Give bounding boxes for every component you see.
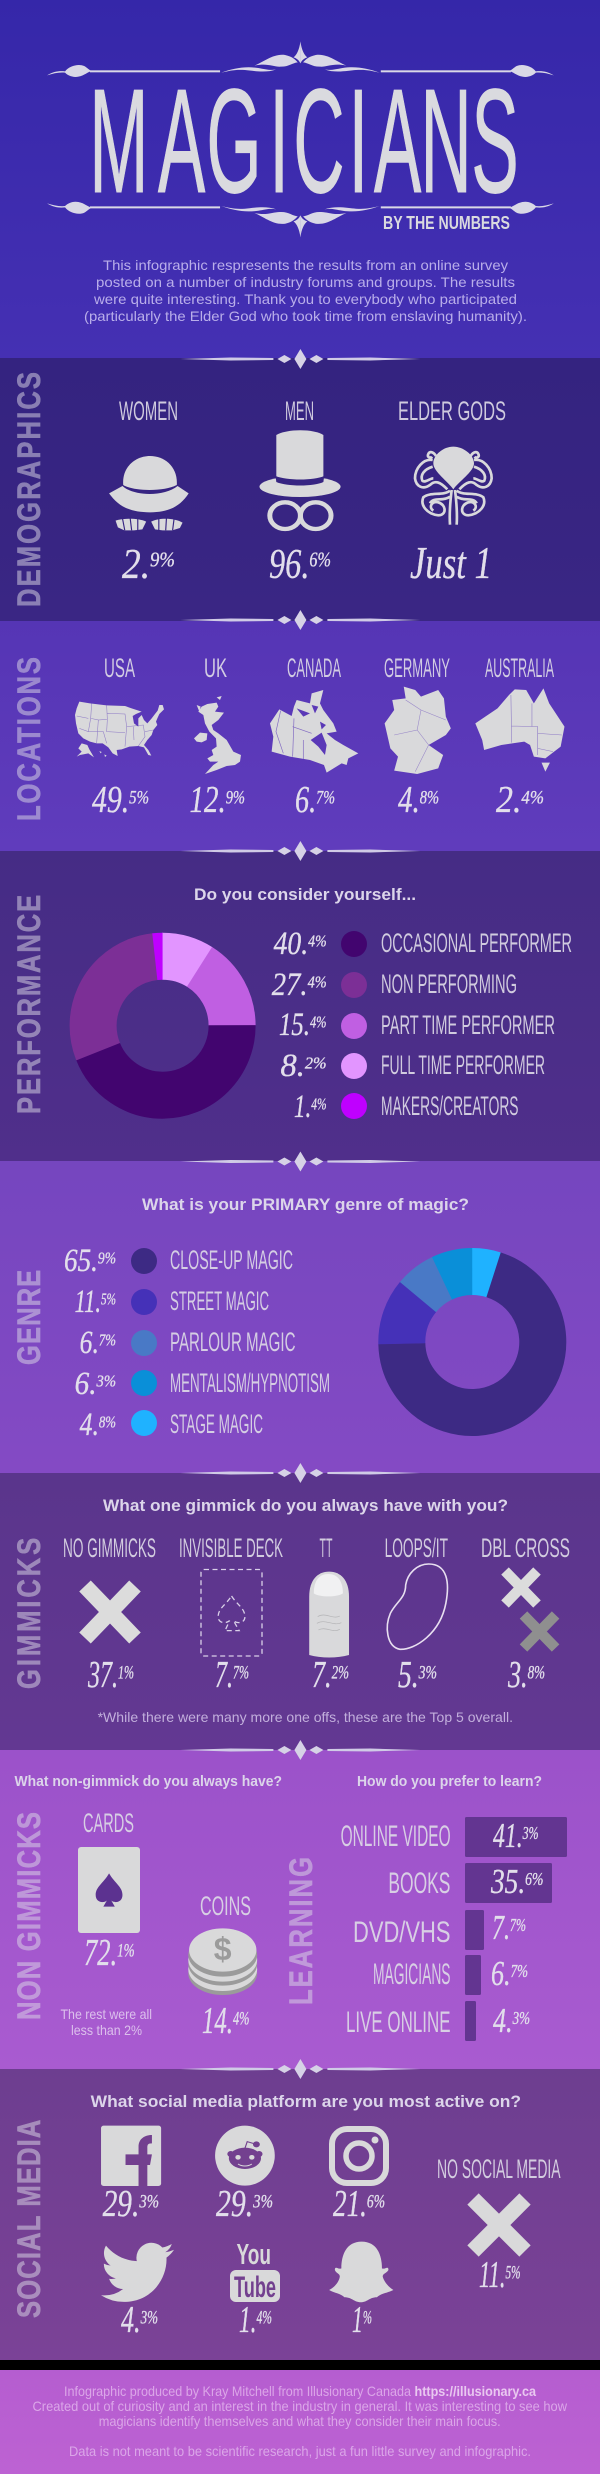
legend: street magic: [75, 1284, 269, 1320]
value: invisible deck: 7%: [233, 1662, 249, 1683]
icon: thumb tip: [309, 1572, 349, 1657]
icon: snapchat: [329, 2242, 393, 2302]
value: tt: 7.: [312, 1654, 340, 1696]
map: australia: [475, 688, 564, 772]
donut chart: genre: [373, 1243, 572, 1441]
label: women: WOMEN: [119, 396, 178, 426]
panel: genre: STREET MAGIC: [170, 1286, 269, 1316]
bar row: dvd and vhs: 7%: [510, 1915, 526, 1935]
panel: locations: GERMANY: [384, 653, 450, 683]
value: canada: 6.: [295, 779, 324, 821]
icon: rubber band loop: [387, 1564, 447, 1649]
panel: header: [0, 0, 600, 358]
section label: genre: GENRE: [12, 1270, 48, 1365]
value: youtube: 4%: [256, 2307, 272, 2328]
icon: x mark: [85, 1586, 135, 1638]
label: elder gods: ELDER GODS: [398, 396, 506, 426]
value: no social media: 5%: [505, 2262, 520, 2283]
legend: stage magic: STAGE MAGIC: [170, 1409, 263, 1439]
legend: non performing: 27.: [272, 967, 313, 1003]
intro text: were quite interesting. Thank you to everybody who participated: [93, 291, 517, 307]
intro text: This infographic respresents the results from an online survey: [103, 257, 508, 273]
panel: locations: CANADA: [287, 653, 341, 683]
icon: elder god: [415, 447, 492, 525]
value: double cross: 3.: [508, 1654, 536, 1696]
value: reddit: 3%: [252, 2191, 273, 2212]
bar row: online video: 3%: [522, 1823, 538, 1843]
section label: gimmicks: GIMMICKS: [12, 1538, 48, 1689]
icon: invisible card: [201, 1570, 262, 1656]
value: instagram: 6%: [367, 2191, 385, 2212]
legend: mentalism and hypnotism: 6.: [75, 1366, 99, 1402]
note: *While there were many more one offs, these are the Top 5 overall.: [98, 1709, 513, 1725]
legend: stage magic: 4.: [80, 1407, 104, 1443]
icon: top hat and glasses: [259, 430, 341, 529]
panel: gimmicks: INVISIBLE DECK: [179, 1533, 283, 1563]
map: germany: [385, 687, 451, 774]
label: usa: USA: [104, 653, 135, 683]
bar row: magicians: 7%: [511, 1961, 528, 1981]
icon: youtube: Tube: [234, 2271, 276, 2304]
value: usa: 49.: [92, 779, 140, 821]
legend: close-up magic: [64, 1243, 293, 1279]
legend: parlour magic: 7%: [99, 1331, 116, 1350]
credits text: Created out of curiosity and an interest in the industry in general. It was interesting to see how: [32, 2398, 568, 2414]
heading: What social media platform are you most active on?: [91, 2093, 521, 2111]
legend: part time performer: [279, 1007, 555, 1043]
legend: non performing: [272, 967, 517, 1003]
title: MAGICIANS: [89, 58, 519, 224]
subtitle: BY THE NUMBERS: [383, 212, 510, 233]
legend: makers and creators: 1.: [294, 1089, 319, 1125]
bar row: books: 6%: [525, 1869, 543, 1889]
icon: youtube: [230, 2239, 280, 2304]
label: cards: CARDS: [83, 1808, 134, 1838]
value: reddit: 29.: [216, 2183, 264, 2225]
heading: Do you consider yourself...: [194, 886, 416, 904]
value: uk: 9%: [226, 787, 245, 808]
bar row: online video: ONLINE VIDEO: [341, 1820, 451, 1853]
legend: full time performer: 8.: [280, 1048, 305, 1084]
label: uk: UK: [204, 653, 227, 683]
value: no gimmicks: 37.: [88, 1654, 136, 1696]
icon: woman hat and lashes: [109, 456, 189, 530]
icon: twitter: [101, 2243, 174, 2302]
legend: mentalism and hypnotism: 3%: [96, 1372, 116, 1391]
value: elder gods: Just 1: [410, 537, 492, 588]
bar row: live online: LIVE ONLINE: [346, 2006, 450, 2039]
legend: occasional performer: 4%: [308, 932, 327, 951]
legend: parlour magic: [80, 1325, 295, 1361]
value: cards: 72.: [84, 1932, 132, 1974]
icon: reddit: [215, 2126, 275, 2186]
value: double cross: 8%: [528, 1662, 545, 1683]
bar row: online video: 41.: [493, 1816, 537, 1855]
legend: mentalism and hypnotism: [75, 1366, 330, 1402]
credits text: Infographic produced by Kray Mitchell from Illusionary Canada https://illusionary.ca: [64, 2383, 536, 2399]
legend: close-up magic: 65.: [64, 1243, 105, 1279]
panel: gimmicks: [0, 1473, 600, 1750]
heading: learning: How do you prefer to learn?: [357, 1773, 542, 1790]
value: women: 2.: [122, 542, 154, 588]
ornament: top flourish: [47, 41, 554, 77]
bar row: books: BOOKS: [388, 1867, 450, 1900]
panel: genre: MENTALISM/HYPNOTISM: [170, 1368, 330, 1398]
bar row: magicians: 6.: [491, 1954, 517, 1993]
value: twitter: 3%: [140, 2307, 158, 2328]
panel: gimmicks: TT: [320, 1533, 332, 1563]
legend: makers and creators: [294, 1089, 518, 1125]
value: no social media: 11.: [479, 2254, 524, 2296]
intro text: posted on a number of industry forums and groups. The results: [96, 274, 515, 290]
legend: close-up magic: CLOSE-UP MAGIC: [170, 1245, 293, 1275]
icon: coin stack: $: [214, 1931, 232, 1967]
value: coins: 14.: [202, 2000, 250, 2042]
value: australia: 2.: [496, 779, 524, 821]
panel: social media: [0, 2069, 600, 2360]
section label: performance: PERFORMANCE: [12, 895, 48, 1114]
value: cards: 1%: [117, 1940, 135, 1961]
credits text: Data is not meant to be scientific research, just a fun little survey and infographic.: [69, 2443, 531, 2459]
section label: locations: LOCATIONS: [12, 657, 48, 821]
bar row: books: [388, 1862, 552, 1903]
value: canada: 7%: [316, 787, 335, 808]
label: loops and it: LOOPS/IT: [385, 1533, 448, 1563]
credits text: magicians identify themselves and what they consider their main focus.: [99, 2413, 501, 2429]
section label: demographics: DEMOGRAPHICS: [12, 372, 48, 607]
label: coins: COINS: [200, 1891, 251, 1921]
label: no gimmicks: NO GIMMICKS: [63, 1533, 156, 1563]
icon: x mark: [473, 2199, 525, 2251]
value: snapchat: %: [363, 2307, 372, 2328]
ornament: bottom flourish: [47, 202, 554, 237]
value: tt: 2%: [332, 1662, 349, 1683]
legend: part time performer: 15.: [279, 1007, 320, 1043]
note: the rest: The rest were all: [60, 2006, 152, 2022]
value: instagram: 21.: [333, 2183, 380, 2225]
value: snapchat: 1: [352, 2299, 371, 2341]
map: canada: [270, 690, 358, 773]
value: no gimmicks: 1%: [118, 1662, 134, 1683]
icon: youtube: You: [236, 2239, 271, 2271]
legend: street magic: 11.: [75, 1284, 113, 1320]
value: usa: 5%: [129, 787, 149, 808]
map: usa: [75, 702, 164, 757]
value: facebook: 3%: [139, 2191, 159, 2212]
panel: genre: [0, 1161, 600, 1473]
legend: occasional performer: 40.: [274, 926, 315, 962]
panel: demographics: MEN: [285, 396, 314, 426]
legend: full time performer: [280, 1048, 545, 1084]
panel: demographics: [0, 358, 600, 621]
icon: coin stack: [188, 1928, 257, 1995]
donut chart: performance: [67, 930, 259, 1122]
panel: footer: [0, 2370, 600, 2474]
section label: non gimmicks: NON GIMMICKS: [12, 1812, 48, 2020]
value: men: 96.: [269, 542, 322, 588]
legend: full time performer: 2%: [305, 1054, 326, 1073]
icon: facebook: [101, 2126, 161, 2186]
bar row: books: 35.: [491, 1862, 535, 1901]
bar row: dvd and vhs: [353, 1908, 526, 1950]
legend: stage magic: [80, 1407, 263, 1443]
value: coins: 4%: [233, 2008, 250, 2029]
legend: stage magic: 8%: [99, 1413, 116, 1432]
intro text: [84, 257, 527, 324]
value: twitter: 4.: [121, 2299, 150, 2341]
note: the rest: less than 2%: [71, 2022, 142, 2038]
bar row: dvd and vhs: 7.: [492, 1908, 518, 1947]
value: invisible deck: 7.: [215, 1654, 243, 1696]
legend: makers and creators: 4%: [311, 1095, 326, 1114]
value: australia: 4%: [521, 787, 544, 808]
section label: social media: SOCIAL MEDIA: [12, 2120, 48, 2318]
icon: playing card: [78, 1847, 140, 1933]
credits text: [32, 2383, 568, 2459]
icon: instagram: [332, 2129, 386, 2183]
bar row: live online: 4.: [493, 2001, 519, 2040]
legend: street magic: 5%: [101, 1290, 116, 1309]
icon: double cross: [505, 1571, 556, 1648]
map: uk: [194, 696, 241, 774]
heading: What is your PRIMARY genre of magic?: [142, 1196, 469, 1214]
legend: parlour magic: 6.: [80, 1325, 104, 1361]
heading: non gimmicks: What non-gimmick do you always have?: [14, 1773, 282, 1790]
value: germany: 8%: [420, 787, 439, 808]
note: the rest: [60, 2006, 152, 2038]
bar row: magicians: MAGICIANS: [373, 1958, 450, 1991]
value: loops: 3%: [418, 1662, 437, 1683]
value: youtube: 1.: [239, 2299, 268, 2341]
panel: performance: [0, 851, 600, 1161]
section label: learning: LEARNING: [284, 1857, 320, 2005]
value: facebook: 29.: [103, 2183, 150, 2225]
bar row: dvd and vhs: DVD/VHS: [353, 1916, 450, 1949]
heading: What one gimmick do you always have with you?: [103, 1497, 508, 1515]
legend: parlour magic: PARLOUR MAGIC: [170, 1327, 296, 1357]
value: uk: 12.: [190, 779, 237, 821]
legend: non performing: 4%: [308, 973, 327, 992]
panel: locations: [0, 621, 600, 851]
legend: close-up magic: 9%: [98, 1249, 116, 1268]
legend: occasional performer: [274, 926, 572, 962]
value: germany: 4.: [398, 779, 426, 821]
value: men: 6%: [309, 547, 331, 571]
value: loops: 5.: [398, 1654, 426, 1696]
panel: non gimmicks and learning: [0, 1750, 600, 2069]
bar row: live online: 3%: [512, 2008, 530, 2028]
legend: part time performer: 4%: [310, 1013, 326, 1032]
value: women: 9%: [150, 547, 175, 571]
intro text: (particularly the Elder God who took time from enslaving humanity).: [84, 308, 527, 324]
